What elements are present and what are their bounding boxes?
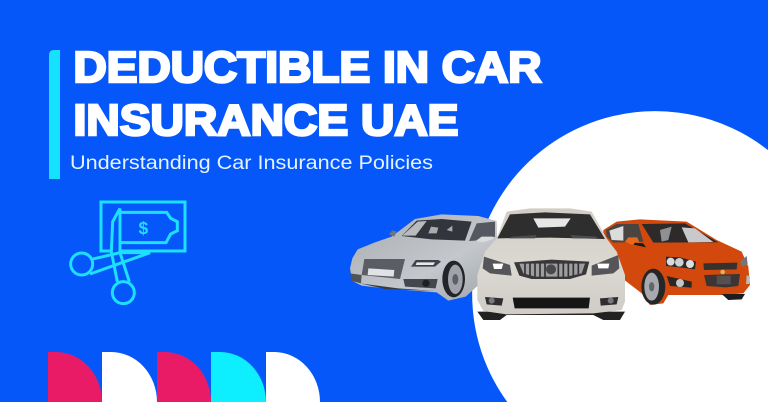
title: DEDUCTIBLE IN CAR	[74, 44, 542, 92]
car: white front-facing sedan	[477, 208, 625, 320]
accent bar	[49, 50, 60, 179]
car: orange hatchback	[603, 219, 750, 305]
white background circle	[472, 111, 768, 402]
title	[74, 44, 542, 145]
decorative quarter circles	[48, 352, 320, 402]
icon: scissors cutting a dollar bill	[71, 202, 185, 304]
car: silver sedan	[350, 214, 498, 301]
icon: scissors cutting a dollar bill: $	[139, 218, 149, 238]
subtitle: Understanding Car Insurance Policies	[70, 153, 433, 174]
title: INSURANCE UAE	[74, 97, 458, 145]
